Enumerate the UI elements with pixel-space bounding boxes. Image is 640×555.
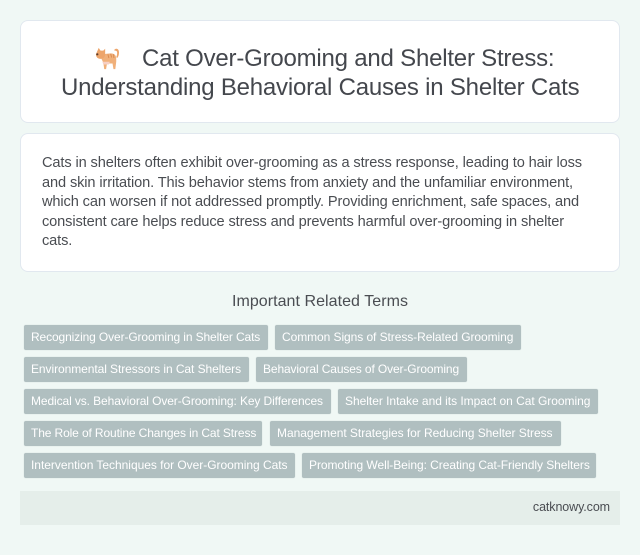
footer bar [20,491,620,525]
tag: Promoting Well-Being: Creating Cat-Friendly Shelters [309,458,590,472]
tag [275,325,521,350]
summary text: cats. [42,233,72,249]
tag: Common Signs of Stress-Related Grooming [282,330,513,344]
summary text: Cats in shelters often exhibit over-grooming as a stress response, leading to hair loss [42,155,582,171]
tag [270,421,561,446]
tag: Management Strategies for Reducing Shelter Stress [277,426,553,440]
tag list [24,324,598,478]
icon: cat [96,48,119,70]
tag [256,357,467,382]
tag [24,325,268,350]
footer source: catknowy.com [533,500,610,514]
tag [338,389,598,414]
tag: Behavioral Causes of Over-Grooming [263,362,459,376]
summary text: which can worsen if not addressed promptly. Providing enrichment, safe spaces, and [42,194,579,210]
tag: Intervention Techniques for Over-Grooming Cats [31,458,288,472]
tag [24,389,331,414]
summary text: consistent care helps reduce stress and prevents harmful over-grooming in shelter [42,214,564,230]
title: Understanding Behavioral Causes in Shelter Cats [61,74,579,101]
summary text: and skin irritation. This behavior stems from anxiety and the unfamiliar environment, [42,175,573,191]
tag: Environmental Stressors in Cat Shelters [31,362,241,376]
tag [24,421,262,446]
title: Cat Over-Grooming and Shelter Stress: [142,45,554,72]
title [61,45,579,101]
tag [24,357,249,382]
tag: The Role of Routine Changes in Cat Stress [31,426,256,440]
tag [24,453,295,478]
tag: Shelter Intake and its Impact on Cat Grooming [345,394,590,408]
heading: related terms: Important Related Terms [232,293,408,310]
tag: Medical vs. Behavioral Over-Grooming: Key Differences [31,394,323,408]
panel: title card [20,20,620,123]
tag [302,453,596,478]
summary text [42,155,582,249]
tag: Recognizing Over-Grooming in Shelter Cats [31,330,260,344]
panel: summary card [20,133,620,272]
